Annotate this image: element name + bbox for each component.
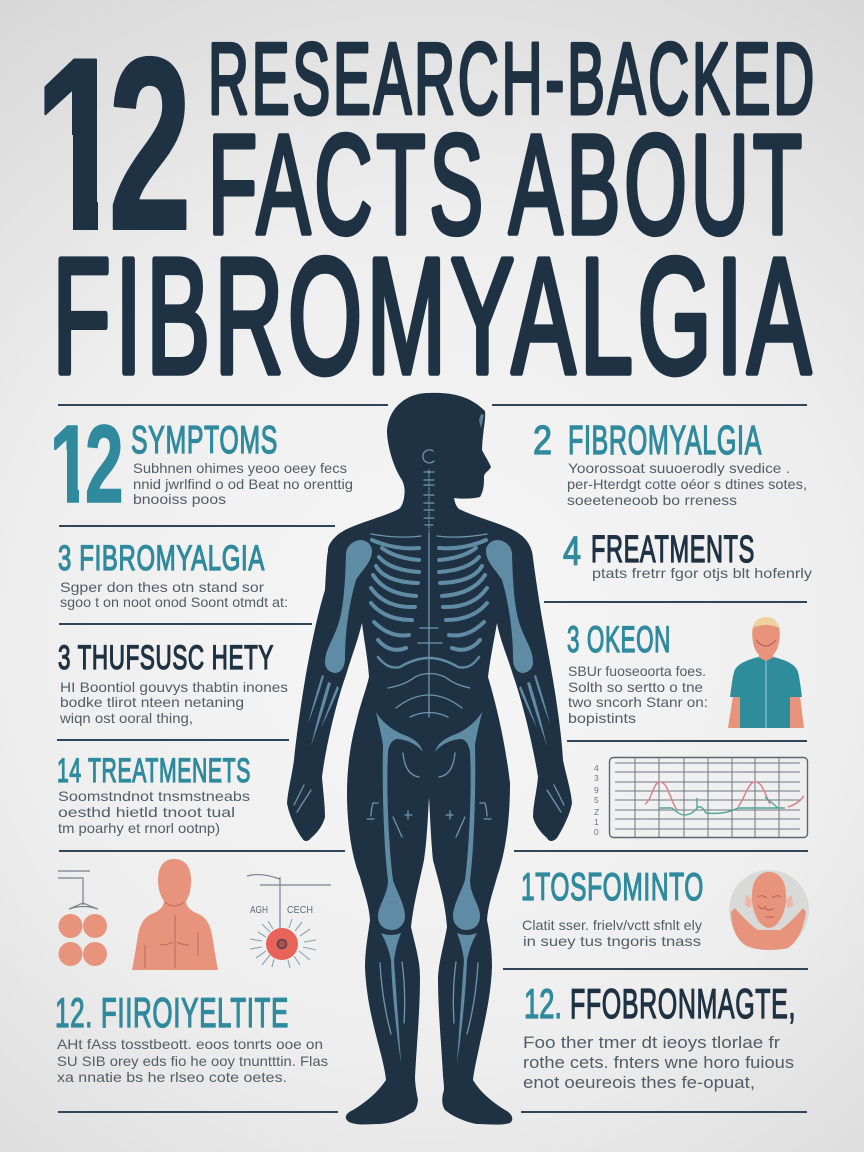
spine	[418, 450, 442, 717]
text block: soeeteneoob bo rreness	[567, 492, 737, 508]
text block: Yoorossoat suuoerodly svedice .	[568, 460, 790, 476]
line chart: Z	[594, 807, 599, 817]
text block: Soomstndnot tnsmstneabs	[58, 788, 250, 804]
big number 12: 1	[50, 403, 91, 526]
text block: bnooiss poos	[133, 491, 226, 507]
title	[44, 40, 813, 378]
heading: FREATMENTS	[591, 529, 755, 571]
heading: 1TOSFOMINTO	[521, 866, 704, 909]
right ribs and arm	[437, 534, 550, 746]
line chart: 5	[594, 795, 599, 805]
panel: tosfominto	[521, 866, 809, 950]
text block	[58, 788, 250, 836]
right pelvis and leg bones	[435, 712, 564, 1063]
panel: treatments left	[57, 752, 251, 836]
text block: nnid jwrlfind o od Beat no orenttig	[133, 476, 353, 492]
text block: Clatit sser. frielv/vctt sfnlt ely	[522, 917, 702, 933]
text block: enot oeureois thes fe-opuat,	[523, 1073, 755, 1092]
number 4: 4	[563, 528, 581, 574]
text block	[567, 460, 807, 508]
line chart	[594, 758, 808, 838]
text block: oesthd hietld tnoot tual	[58, 804, 235, 820]
line chart: 4	[594, 763, 599, 773]
big number 12: 2	[85, 403, 124, 526]
panel: treatments right	[563, 528, 812, 581]
heading: 3 OKEON	[567, 619, 671, 660]
icon: pain point diagram	[247, 875, 331, 968]
heading: symptoms: SYMPTOMS	[131, 419, 278, 462]
heading: 3 FIBROMYALGIA	[58, 539, 265, 578]
panel: final left section	[55, 989, 328, 1085]
text block: wiqn ost ooral thing,	[59, 710, 193, 726]
text block: two sncorh Stanr on:	[568, 694, 708, 710]
text block	[523, 1033, 794, 1092]
silhouette	[287, 393, 572, 1125]
icon: four circles on a stand	[58, 871, 107, 966]
number 12: 12.	[524, 980, 562, 1027]
title: 2	[108, 6, 192, 280]
panel: symptoms	[54, 424, 352, 507]
text block: Sgper don thes otn stand sor	[60, 579, 264, 595]
left ribs and arm	[308, 534, 421, 746]
panel: okeon	[567, 617, 804, 728]
text block: bopistints	[568, 710, 636, 726]
text block: SU SIB orey eds fio he ooy tnuntttin. Flas	[57, 1053, 328, 1069]
text block: Subhnen ohimes yeoo oeey fecs	[133, 460, 347, 476]
line chart: 1	[594, 817, 599, 827]
text block: xa nnatie bs he rlseo cote oetes.	[57, 1069, 287, 1085]
panel: fibromyalgia right	[533, 417, 807, 508]
body silhouette with skeleton	[287, 393, 572, 1125]
heading: 3 THUFSUSC HETY	[58, 639, 274, 677]
left pelvis and leg bones	[294, 712, 423, 1063]
text block: AHt fAss tosstbeott. eoos tonrts ooe on	[57, 1036, 323, 1052]
text block	[568, 663, 708, 726]
text block: bodke tlirot nteen netaning	[60, 694, 244, 710]
text block: tm poarhy et rnorl ootnp)	[58, 820, 220, 836]
icon: pain point diagram: AGH	[250, 905, 268, 916]
text block: rothe cets. fnters wne horo fuious	[523, 1053, 794, 1072]
text block	[57, 1036, 328, 1085]
text block: HI Boontiol gouvys thabtin inones	[60, 679, 288, 695]
panel: fibromyalgia left	[58, 539, 288, 610]
text block: sgoo t on noot onod Soont otmdt at:	[60, 594, 288, 610]
heading: 12. FIIROIYELTITE	[55, 989, 289, 1036]
line chart: 0	[594, 827, 599, 837]
text block: Foo ther tmer dt ieoys tlorlae fr	[523, 1033, 780, 1052]
line chart: 9	[594, 785, 599, 795]
panel: final right section	[523, 980, 796, 1092]
text block: SBUr fuoseoorta foes.	[568, 663, 706, 679]
text block: per-Hterdgt cotte oéor s dtines sotes,	[567, 476, 807, 492]
text block: ptats fretrr fgor otjs blt hofenrly	[592, 565, 812, 581]
number 2: 2	[533, 417, 552, 463]
text block	[60, 579, 288, 610]
heading: 14 TREATMENETS	[57, 752, 251, 790]
hair tuft	[479, 414, 484, 428]
text block	[522, 917, 702, 949]
icon: face with hands in pain	[729, 870, 809, 950]
text block	[59, 679, 288, 726]
icon: person in teal shirt	[728, 617, 804, 728]
text block: Solth so sertto o tne	[568, 679, 703, 695]
big number 12	[54, 424, 122, 503]
line chart: 3	[594, 773, 599, 783]
abdomen lines	[378, 657, 479, 717]
panel: thufsusc hety	[58, 639, 288, 726]
text block: in suey tus tngoris tnass	[523, 933, 701, 949]
icon: torso figure	[132, 859, 218, 970]
title: 1	[34, 6, 127, 280]
icon: pain point diagram: CECH	[287, 905, 313, 916]
text block	[133, 460, 353, 507]
